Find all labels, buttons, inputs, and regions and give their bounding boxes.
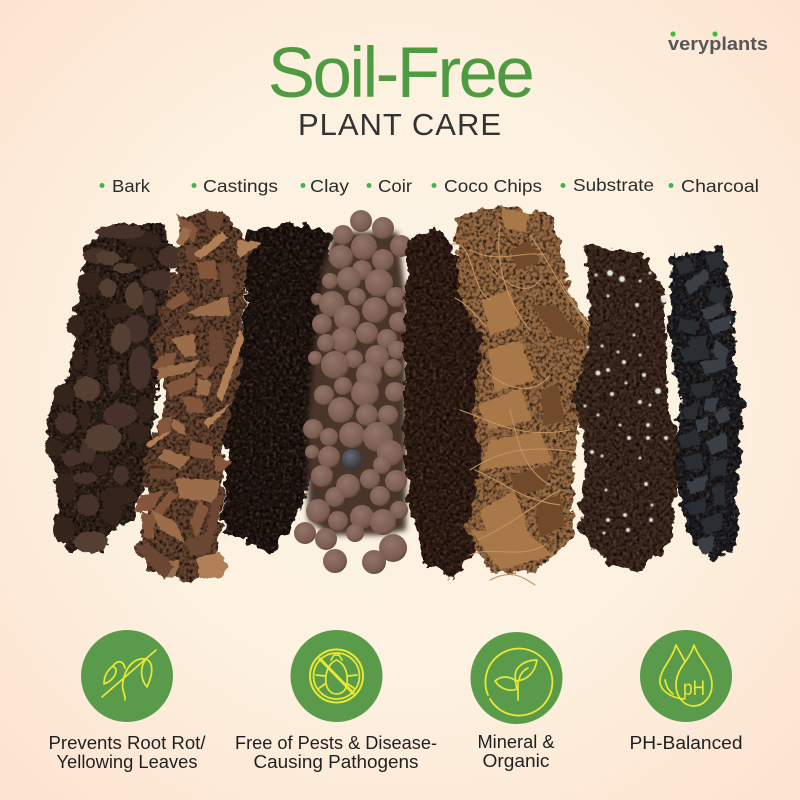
- logo: veryplants: [668, 34, 768, 54]
- pile: dark coir: [404, 228, 486, 580]
- pile: dark bark: [45, 224, 186, 553]
- material labels: Clay: [310, 176, 349, 196]
- pile: clay pebbles: [294, 210, 412, 574]
- material labels: [100, 175, 759, 196]
- material labels: Charcoal: [681, 176, 759, 196]
- icon: ph water drops: pH: [683, 677, 705, 700]
- title: Soil-Free: [268, 34, 532, 113]
- pile: coco chips: [452, 205, 602, 585]
- label: Causing Pathogens: [254, 752, 418, 772]
- label: Organic: [482, 751, 550, 771]
- subtitle: PLANT CARE: [298, 107, 502, 142]
- pile: orange bark chips: [134, 210, 262, 580]
- benefit: mineral and organic: [470, 632, 562, 771]
- benefit: prevents root rot: [48, 630, 206, 772]
- pile: black castings: [216, 222, 330, 552]
- material labels: Coco Chips: [444, 176, 542, 196]
- material labels: Substrate: [573, 175, 654, 195]
- label: Prevents Root Rot/: [48, 733, 206, 753]
- label: Free of Pests & Disease-: [235, 733, 437, 753]
- pile: charcoal: [668, 246, 744, 560]
- label: PH-Balanced: [630, 733, 742, 753]
- material labels: Bark: [112, 176, 150, 196]
- material labels: Coir: [378, 176, 412, 196]
- label: Yellowing Leaves: [56, 752, 198, 772]
- material labels: Castings: [203, 176, 278, 196]
- benefit: ph balanced: [630, 630, 742, 753]
- icon: sprout in ring: [485, 649, 552, 716]
- label: Mineral &: [478, 732, 554, 752]
- pile: substrate: [574, 246, 680, 572]
- benefit: free of pests: [235, 630, 437, 772]
- icon: crossed-out bug: [310, 650, 363, 702]
- icon: wilting plant: [102, 650, 156, 700]
